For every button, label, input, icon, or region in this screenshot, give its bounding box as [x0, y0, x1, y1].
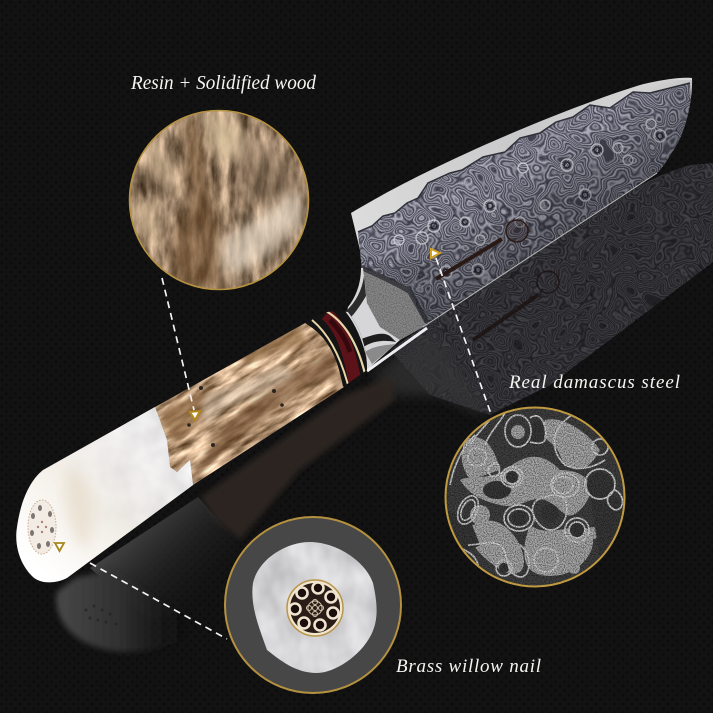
wood handle section [155, 322, 344, 485]
handle wood reflection [200, 376, 395, 540]
marker triangle: wood [190, 411, 200, 420]
light steel bands [460, 419, 600, 576]
chrome bolster reflection [372, 332, 490, 418]
dashed line: pin [90, 563, 227, 639]
white resin end cap [252, 542, 377, 673]
blade reflection [390, 163, 713, 415]
brass mosaic pin [287, 580, 343, 636]
resin reflection wedge [90, 497, 240, 620]
heading: brass willow nail: Brass willow nail [396, 656, 541, 677]
heading: resin and solidified wood: Resin + Solidified wood [130, 72, 317, 94]
logo circle [506, 220, 528, 242]
resin handle section [16, 407, 193, 582]
dashed line: damascus [436, 258, 491, 414]
satin bolster [362, 268, 427, 340]
damascus pattern [350, 80, 700, 350]
knife [0, 78, 700, 590]
logo bar [436, 239, 502, 279]
lens: resin and solidified wood [130, 110, 308, 290]
lens: brass willow nail [225, 517, 401, 693]
handle collar rings [305, 311, 367, 387]
blade [350, 78, 700, 350]
hamon wave [358, 83, 690, 232]
cutting edge highlight [423, 173, 657, 327]
steel rings [449, 414, 624, 578]
resin end reflection [56, 570, 200, 652]
marker triangle: blade [431, 249, 440, 258]
dark islands [465, 424, 612, 572]
heading: real damascus steel: Real damascus steel [508, 372, 680, 393]
marker triangle: pin [55, 543, 64, 551]
mosaic pin on handle end [28, 500, 56, 554]
lens: damascus steel [445, 400, 630, 590]
chrome bolster [346, 268, 427, 371]
dashed line: wood [162, 278, 194, 410]
